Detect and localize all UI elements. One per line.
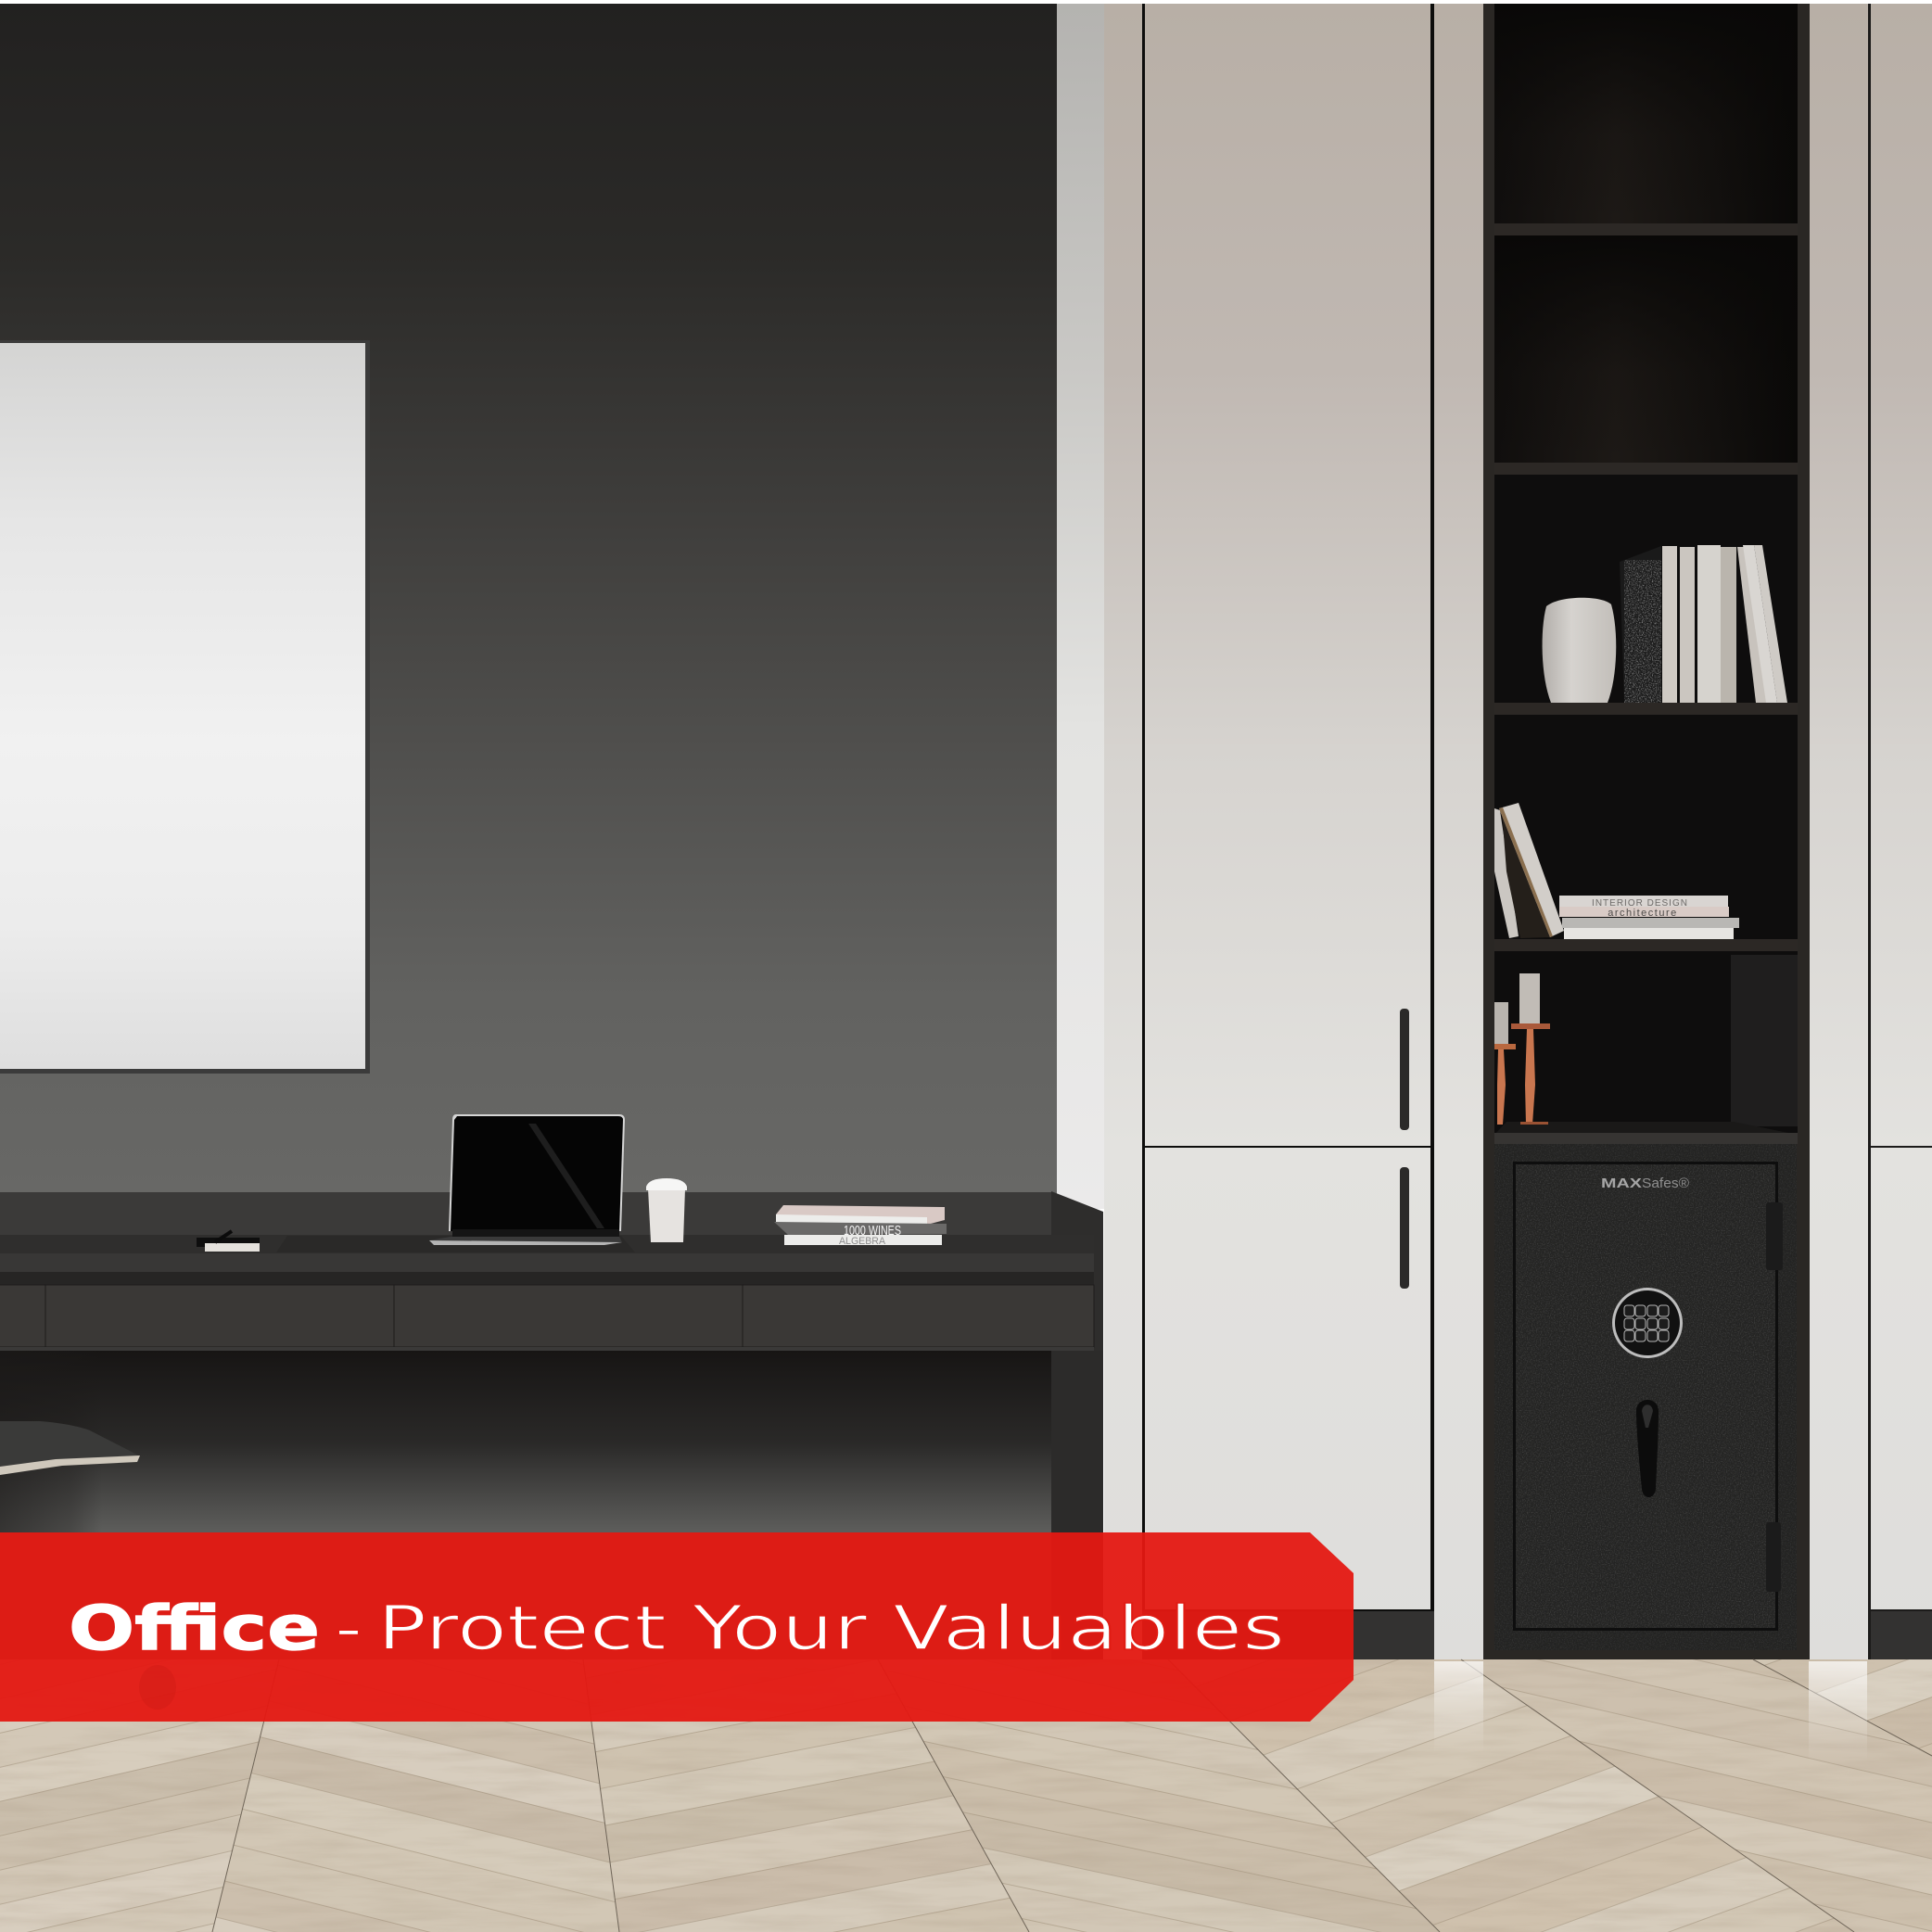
stacked books on shelf: architecture — [1608, 908, 1678, 919]
title text: - — [335, 1593, 362, 1664]
shelving unit — [1483, 4, 1810, 1661]
chair wheel seen through banner — [139, 1665, 176, 1710]
white piers beside the wall — [1057, 4, 1142, 1663]
dark wall — [0, 4, 1059, 1663]
book stack on desk: 1000 WINES — [844, 1223, 901, 1239]
stacked books on shelf: INTERIOR DESIGN — [1592, 898, 1688, 909]
cabinet doors left — [1142, 4, 1434, 1663]
safe body — [1494, 1144, 1797, 1650]
safe handle — [1636, 1400, 1659, 1497]
book stack on desk — [774, 1205, 947, 1247]
coffee cup — [646, 1178, 687, 1242]
safe body: Safes® — [1642, 1176, 1689, 1191]
book stack on desk: ALGEBRA — [839, 1236, 886, 1247]
title text: Office — [69, 1593, 320, 1664]
shelves — [1494, 223, 1798, 1144]
safe door — [1513, 1162, 1778, 1631]
safe hinges — [1766, 1202, 1783, 1592]
wood floor — [0, 1659, 1932, 1932]
notebook and pen — [197, 1231, 260, 1252]
chair — [0, 1421, 140, 1475]
upright books — [1620, 545, 1787, 703]
right pier and door — [1809, 4, 1932, 1661]
drawers — [0, 1285, 1094, 1347]
leaning books — [1494, 803, 1564, 938]
wall art poster — [0, 340, 370, 1074]
cabinet handles — [1400, 1009, 1409, 1289]
brand label: MAX — [1601, 1176, 1642, 1191]
stacked books on shelf — [1559, 896, 1739, 939]
desk mat — [276, 1236, 635, 1252]
copper candle holders — [1494, 973, 1550, 1125]
laptop — [429, 1114, 625, 1245]
electronic keypad — [1612, 1288, 1683, 1358]
title text — [69, 1593, 1285, 1664]
pier between door and shelf — [1434, 4, 1483, 1661]
vase — [1543, 598, 1616, 703]
title text: Protect Your Valuables — [377, 1593, 1285, 1664]
red title banner — [0, 1532, 1354, 1722]
desk — [0, 1191, 1103, 1659]
